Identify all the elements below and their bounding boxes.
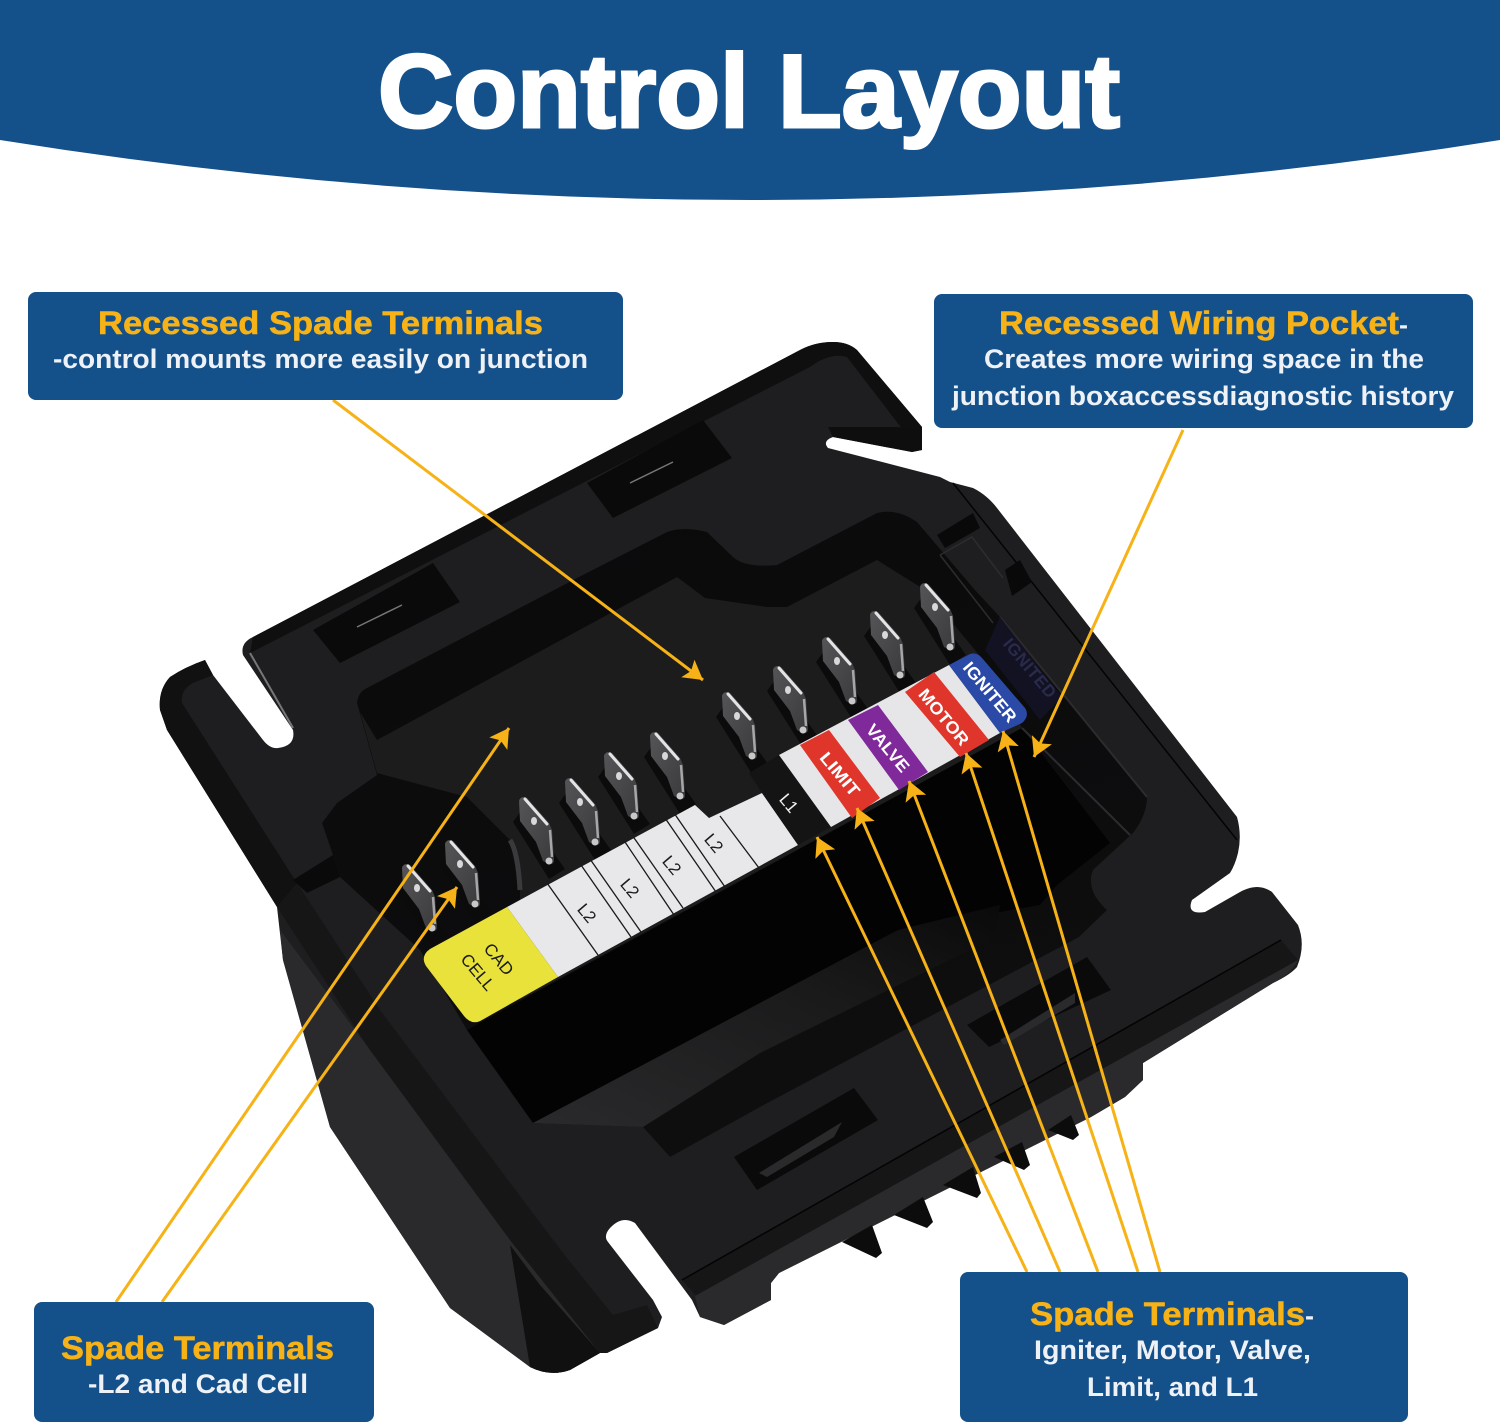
right ledge	[937, 513, 1032, 596]
callout: spade terminals igniter motor valve limit L1: Igniter, Motor, Valve,	[1034, 1335, 1311, 1365]
callout: spade terminals L2 and cad cell: Spade Terminals	[61, 1330, 334, 1366]
CAD CELL text	[457, 939, 517, 995]
inner box outline	[940, 537, 1003, 623]
white L2 section	[507, 793, 798, 977]
lower wall	[695, 960, 1298, 1325]
top rim	[250, 342, 922, 653]
title: Control Layout	[378, 34, 1120, 150]
L2 labels	[573, 830, 727, 927]
red MOTOR tab	[905, 672, 989, 757]
callout: spade terminals L2 and cad cell: -L2 and Cad Cell	[88, 1369, 308, 1399]
blue IGNITER tab	[949, 654, 1027, 733]
right rail line	[682, 483, 1281, 1280]
slot edge highlight	[250, 653, 293, 728]
callout: spade terminals igniter motor valve limit L1: Spade Terminals	[1030, 1296, 1305, 1332]
L2 labels: L2	[658, 852, 685, 879]
arrow: limit	[857, 808, 1060, 1272]
arrow: wiring pocket	[1034, 430, 1183, 757]
callout: recessed wiring pocket: junction boxaccessdiagnostic history	[951, 381, 1454, 411]
lower flange lip	[682, 940, 1298, 1300]
faint IGNITED marking: IGNITED	[999, 635, 1060, 702]
callout: spade terminals L2 and cad cell	[34, 1302, 374, 1422]
left rim	[160, 660, 297, 907]
corner shadow on wall	[510, 1245, 600, 1373]
VALVE label: VALVE	[862, 720, 913, 776]
L2 labels: L2	[616, 875, 643, 902]
header banner	[0, 0, 1500, 200]
label strip	[424, 654, 1027, 1022]
L2 labels: L2	[700, 830, 727, 857]
callout: recessed wiring pocket: Recessed Wiring Pocket	[999, 305, 1399, 341]
arrow: recessed spade terminals	[333, 400, 703, 680]
arrow: spade terminals L2 pocket	[116, 728, 509, 1302]
spade terminals	[396, 583, 966, 946]
bottom mounting clips	[734, 957, 1111, 1190]
top mounting clips	[313, 420, 732, 663]
MOTOR label: MOTOR	[914, 685, 973, 749]
IGNITER label: IGNITER	[959, 658, 1020, 726]
pocket floor	[360, 560, 1022, 1000]
CAD CELL text: CELL	[457, 950, 499, 995]
callout: spade terminals igniter motor valve limit L1	[960, 1272, 1408, 1422]
black L1 section	[749, 755, 831, 845]
left ledge highlight	[510, 840, 520, 890]
yellow CAD CELL tab	[424, 907, 558, 1022]
left side clip	[293, 855, 340, 893]
callout: spade terminals igniter motor valve limit L1: Limit, and L1	[1087, 1372, 1258, 1402]
trough ramp	[533, 905, 1000, 1127]
arrow: igniter	[1003, 731, 1160, 1272]
tray recess	[322, 512, 1147, 1157]
faint IGNITED marking	[985, 617, 1062, 720]
callout: recessed spade terminals	[28, 292, 623, 400]
callout: recessed spade terminals: -control mounts more easily on junction	[53, 344, 588, 374]
ear underside	[828, 427, 922, 452]
arrow: L1	[817, 837, 1027, 1272]
device: black control unit	[160, 342, 1302, 1373]
L2 labels: L2	[573, 900, 600, 927]
callout: recessed spade terminals: Recessed Spade Terminals	[98, 305, 543, 341]
right channel wall lines	[1000, 617, 1147, 835]
arrow: valve	[909, 781, 1098, 1272]
arrow: spade terminals cad cell	[162, 887, 457, 1302]
mounting fins	[842, 1115, 1079, 1258]
left outer wall	[280, 930, 600, 1373]
black trough below label strip	[467, 728, 1110, 1123]
LIMIT label: LIMIT	[816, 748, 864, 801]
left lip	[277, 883, 658, 1353]
CAD CELL text: CAD	[480, 939, 517, 979]
red LIMIT tab	[800, 730, 880, 818]
callout: recessed wiring pocket: -	[1399, 310, 1408, 340]
label divider lines	[547, 813, 759, 955]
device body silhouette	[160, 342, 1302, 1373]
L1 label: L1	[775, 790, 802, 817]
callout: spade terminals igniter motor valve limit L1: -	[1305, 1301, 1314, 1331]
callout: recessed wiring pocket	[934, 294, 1473, 428]
callout: recessed wiring pocket: Creates more wiring space in the	[984, 344, 1424, 374]
purple VALVE tab	[848, 705, 928, 790]
white section behind coloured tabs	[779, 665, 1000, 827]
arrow: motor	[966, 753, 1138, 1272]
